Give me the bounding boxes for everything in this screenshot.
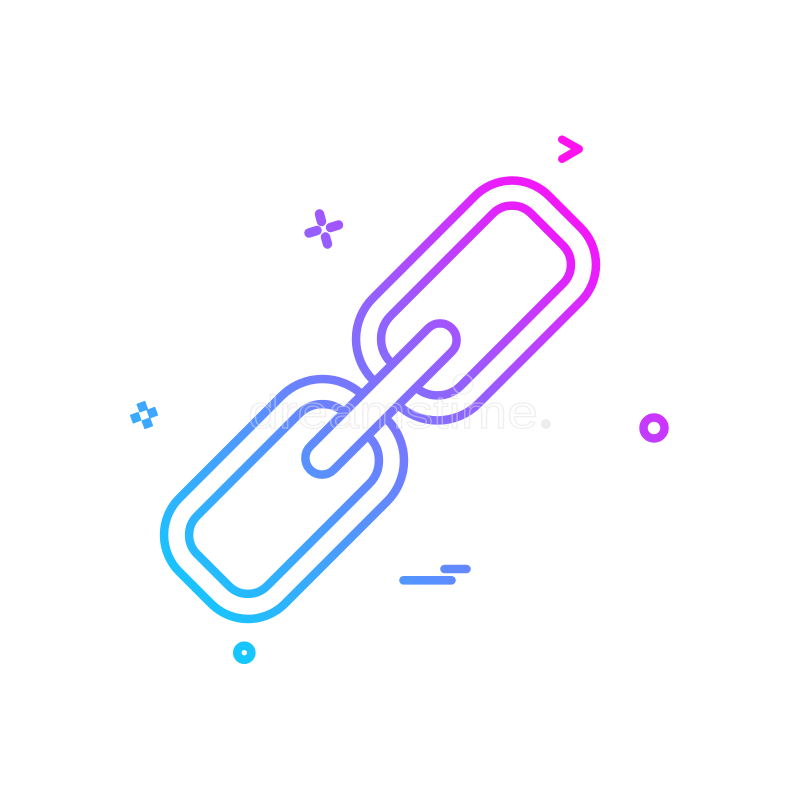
icon: lower chain link [164, 379, 404, 619]
icon: upper chain link [356, 181, 596, 420]
upper link outer outline [356, 181, 596, 420]
lower link inner outline [189, 404, 379, 594]
watermark [248, 374, 551, 438]
icon: diamond of four squares [130, 402, 158, 428]
upper link inner outline [381, 206, 571, 395]
lower link outer outline [164, 379, 404, 619]
icon: chevron [562, 140, 579, 159]
icon: speed dashes [404, 569, 466, 580]
icon: central connecting bar [305, 323, 457, 475]
icon: ring right [644, 418, 664, 438]
icon: four-petal sparkle [309, 214, 338, 244]
watermark word: dreamstime [248, 386, 538, 438]
icon: small ring bottom [237, 646, 251, 660]
watermark logo swirl [453, 374, 473, 394]
watermark dot [541, 419, 551, 429]
